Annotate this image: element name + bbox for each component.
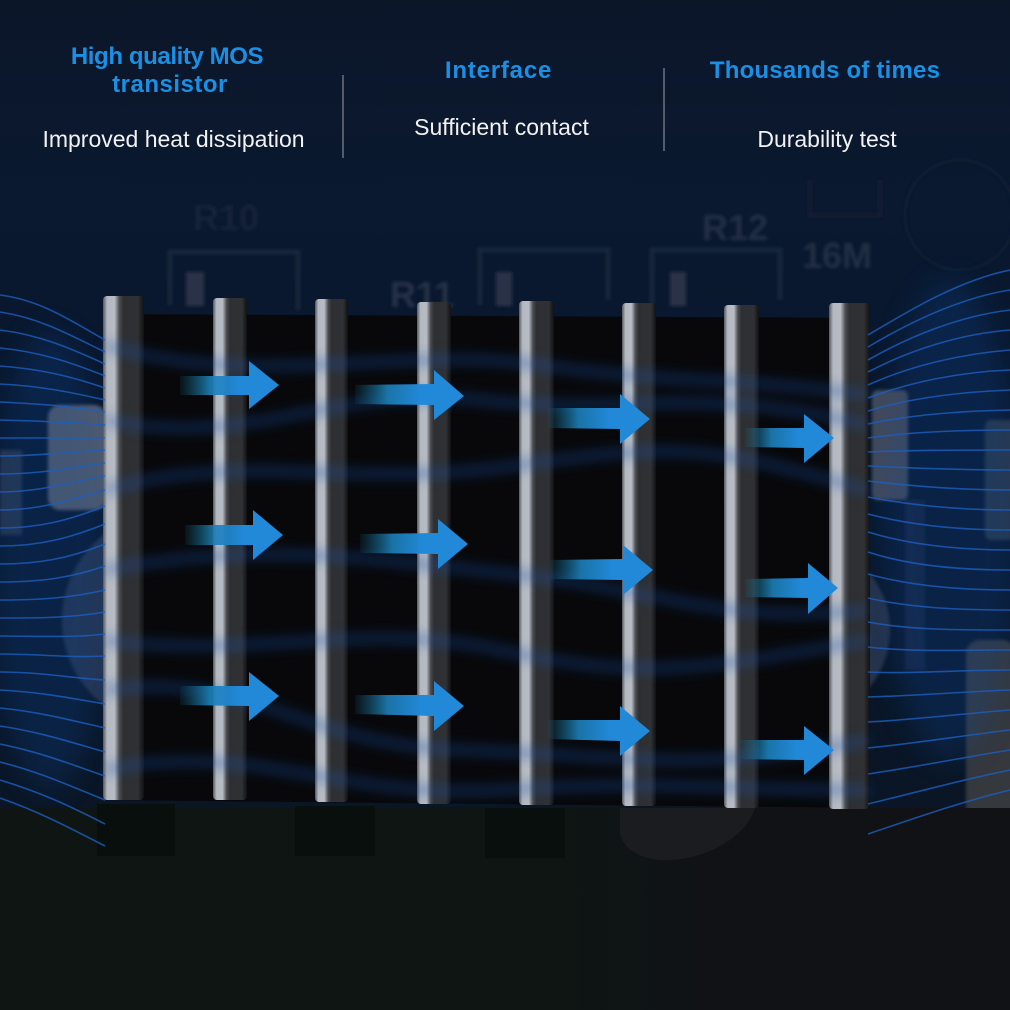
arrow 5 (185, 510, 283, 560)
faint circuit board markings: R12 (702, 207, 768, 248)
fin 3 (315, 299, 348, 802)
dividers (342, 75, 344, 158)
airflow lines left (0, 295, 105, 846)
arrow 6 (360, 519, 468, 569)
side components behind airflow (0, 390, 1010, 856)
column 2 heading: Interface (445, 57, 552, 84)
column 1 caption: Improved heat dissipation (42, 126, 305, 152)
column 1 heading: High quality MOS (71, 43, 264, 70)
arrow 11 (548, 706, 650, 756)
faint circuit board markings: 16M (802, 235, 872, 276)
arrow 4 (745, 414, 834, 463)
dark board below heat sink (0, 804, 1010, 1010)
column 1 heading line 2: transistor (112, 71, 228, 98)
arrow row 2 (185, 510, 838, 614)
arrow 9 (180, 672, 279, 721)
fin 6 (622, 303, 656, 806)
arrow 2 (355, 370, 464, 420)
airflow bands through heat sink (105, 345, 868, 791)
arrow 1 (180, 361, 279, 409)
arrow 3 (548, 394, 650, 444)
fin 8 (829, 303, 870, 809)
column 3 caption: Durability test (757, 126, 897, 152)
arrow row 3 (180, 672, 834, 775)
arrow 10 (355, 681, 464, 731)
arrow 12 (740, 726, 834, 775)
faint circuit board markings (170, 160, 1010, 315)
column 3 heading: Thousands of times (710, 57, 940, 84)
faint circuit board markings: R11 (390, 274, 454, 315)
fin 5 (519, 301, 554, 805)
fin 7 (724, 305, 759, 808)
airflow lines right (868, 270, 1010, 834)
arrow 7 (550, 545, 653, 595)
column 2 caption: Sufficient contact (414, 114, 589, 140)
fin 2 (213, 298, 247, 800)
blue glow on sides (0, 280, 1010, 790)
fin 1 (103, 296, 144, 800)
arrow row 1 (180, 361, 834, 463)
faint circuit board markings: R10 (193, 197, 259, 238)
heat sink body (103, 296, 870, 809)
arrow 8 (745, 563, 838, 614)
fin 4 (417, 302, 451, 804)
